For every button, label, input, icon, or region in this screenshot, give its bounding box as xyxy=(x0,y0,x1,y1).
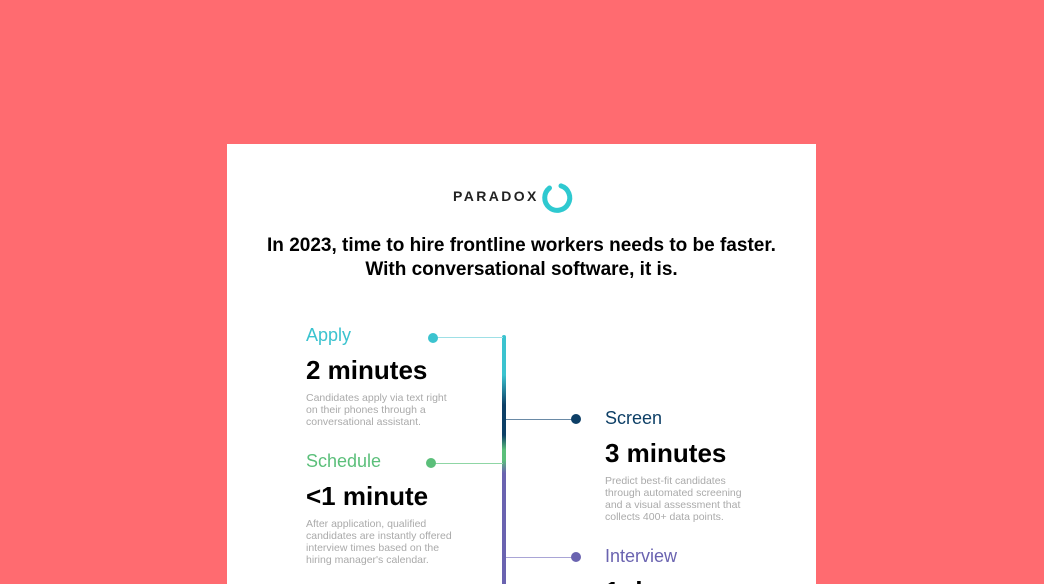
step: screen: 3 minutes xyxy=(605,438,726,468)
step: interview xyxy=(605,546,677,584)
title: With conversational software, it is. xyxy=(365,259,678,280)
step: schedule xyxy=(306,451,452,566)
step: screen: through automated screening xyxy=(605,487,742,499)
step: apply: Candidates apply via text right xyxy=(306,392,447,404)
step: screen: collects 400+ data points. xyxy=(605,511,724,523)
step: schedule: <1 minute xyxy=(306,481,428,511)
title: In 2023, time to hire frontline workers needs to be faster. xyxy=(267,235,776,256)
timeline line xyxy=(502,335,506,584)
step: schedule: After application, qualified xyxy=(306,518,426,530)
step: apply: on their phones through a xyxy=(306,404,426,416)
step: screen: Screen xyxy=(605,408,662,428)
step: interview: Interview xyxy=(605,546,677,566)
connectors xyxy=(432,337,503,338)
title xyxy=(267,235,776,280)
step: apply: conversational assistant. xyxy=(306,416,421,428)
step: screen: Predict best-fit candidates xyxy=(605,475,726,487)
panel: card xyxy=(227,144,816,584)
step: schedule: Schedule xyxy=(306,451,381,471)
step: apply: Apply xyxy=(306,325,351,345)
step: schedule: candidates are instantly offered xyxy=(306,530,452,542)
step: screen xyxy=(605,408,742,523)
step: apply xyxy=(306,325,447,428)
logo xyxy=(453,183,572,213)
step: schedule: hiring manager's calendar. xyxy=(306,554,429,566)
logo: PARADOX xyxy=(453,188,539,204)
step: screen: and a visual assessment that xyxy=(605,499,740,511)
step: apply: 2 minutes xyxy=(306,355,427,385)
step: schedule: interview times based on the xyxy=(306,542,439,554)
